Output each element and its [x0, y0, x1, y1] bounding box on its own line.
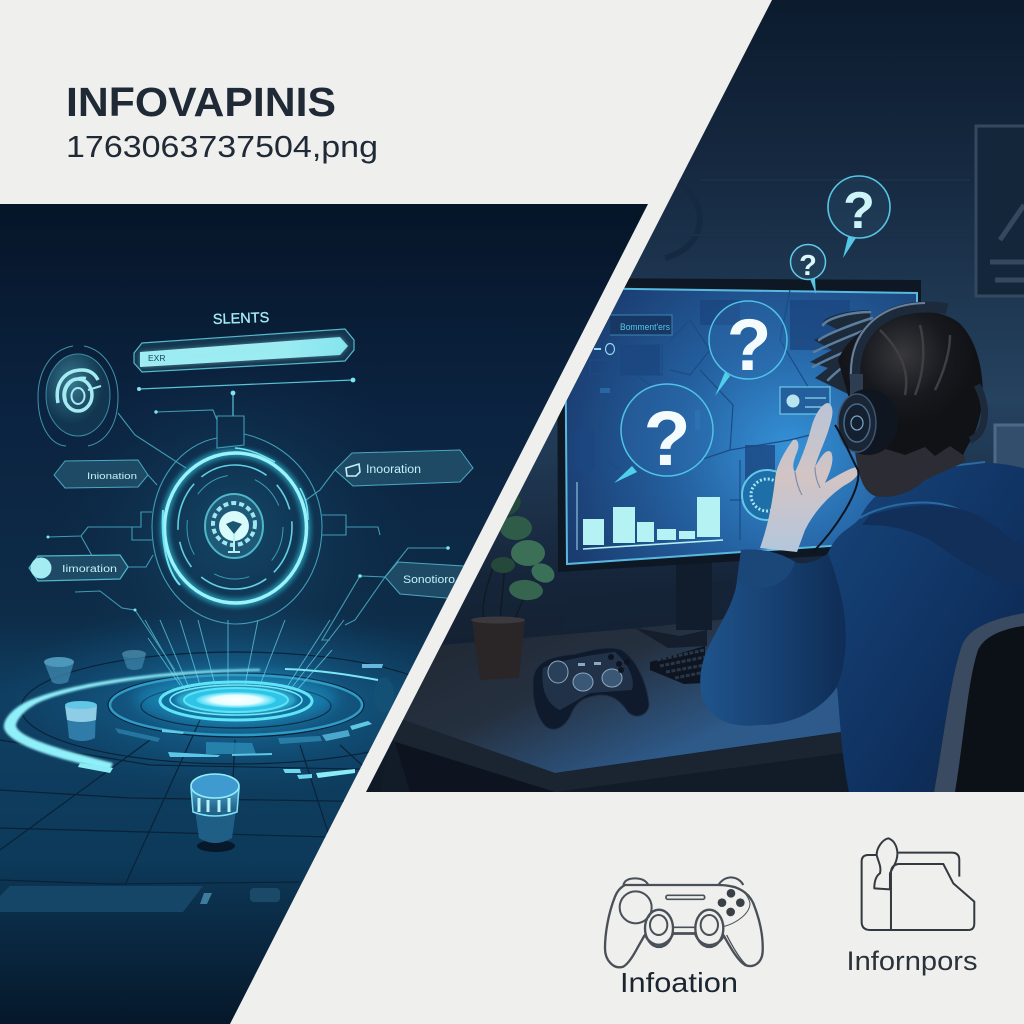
- gear emblem: [205, 494, 263, 558]
- label: lower right: Sonotioro: [403, 574, 455, 586]
- chair: [934, 612, 1024, 792]
- label: lower right: [384, 562, 464, 598]
- question bubble: screen right: [709, 301, 787, 396]
- label: infornpors: Infornpors: [846, 946, 978, 976]
- progress bar: [134, 329, 354, 372]
- headphones: [812, 303, 984, 553]
- label: lower left: Iimoration: [62, 564, 117, 575]
- plant: [471, 489, 558, 680]
- bar chart: [577, 482, 723, 550]
- hoodie body: [828, 462, 1024, 792]
- sleeve: [700, 550, 846, 726]
- connector line: [137, 378, 355, 416]
- light rays: [145, 620, 344, 690]
- label: lower left: [29, 555, 128, 581]
- keyboard: [650, 646, 705, 684]
- neck and beard: [855, 446, 965, 497]
- desk controller: [533, 648, 649, 729]
- heading: slents: SLENTS: [213, 310, 270, 328]
- desk: [388, 620, 842, 792]
- question bubble: screen left: ?: [643, 396, 691, 482]
- label: top left: Inionation: [87, 471, 137, 482]
- icon: game controller outline: [605, 877, 763, 967]
- subtitle: 1763063737504,png: [66, 129, 378, 164]
- hair: [838, 312, 983, 456]
- hair fringe: [810, 310, 872, 395]
- label: infoation: Infoation: [620, 967, 738, 998]
- question bubble: screen right: ?: [727, 305, 771, 386]
- question bubble: top large: [828, 176, 890, 258]
- panel: gamer at desk: [360, 0, 1024, 800]
- question bubble: top large: ?: [843, 182, 875, 240]
- person: [700, 303, 1024, 792]
- large cup: [191, 774, 239, 852]
- screen label: Bomment'ers: [620, 322, 670, 333]
- cups: [44, 650, 394, 741]
- bar label: EXR: [148, 353, 165, 363]
- question bubble: top small: ?: [799, 250, 817, 282]
- floor grid: [0, 652, 451, 885]
- wall decor: [662, 126, 1024, 485]
- hand: [760, 403, 859, 552]
- title: INFOVAPINIS: [66, 79, 336, 125]
- small screen panel: [780, 387, 830, 414]
- question bubble: top small: [790, 244, 826, 294]
- label: top right: Inooration: [366, 464, 421, 476]
- label: top left: [54, 460, 148, 488]
- panel: holographic interface: [0, 204, 660, 1024]
- target icon disc: [38, 346, 118, 446]
- hologram rings: [4, 669, 378, 779]
- screen map details: [590, 290, 810, 540]
- central dial: [46, 410, 450, 670]
- monitor: [557, 278, 921, 648]
- label: top right: [335, 450, 473, 486]
- icon: folder outline: [862, 838, 974, 930]
- question bubble: screen left: [614, 384, 713, 483]
- screen label: [594, 315, 672, 354]
- floor slab: [0, 886, 280, 912]
- emblem: [741, 469, 776, 521]
